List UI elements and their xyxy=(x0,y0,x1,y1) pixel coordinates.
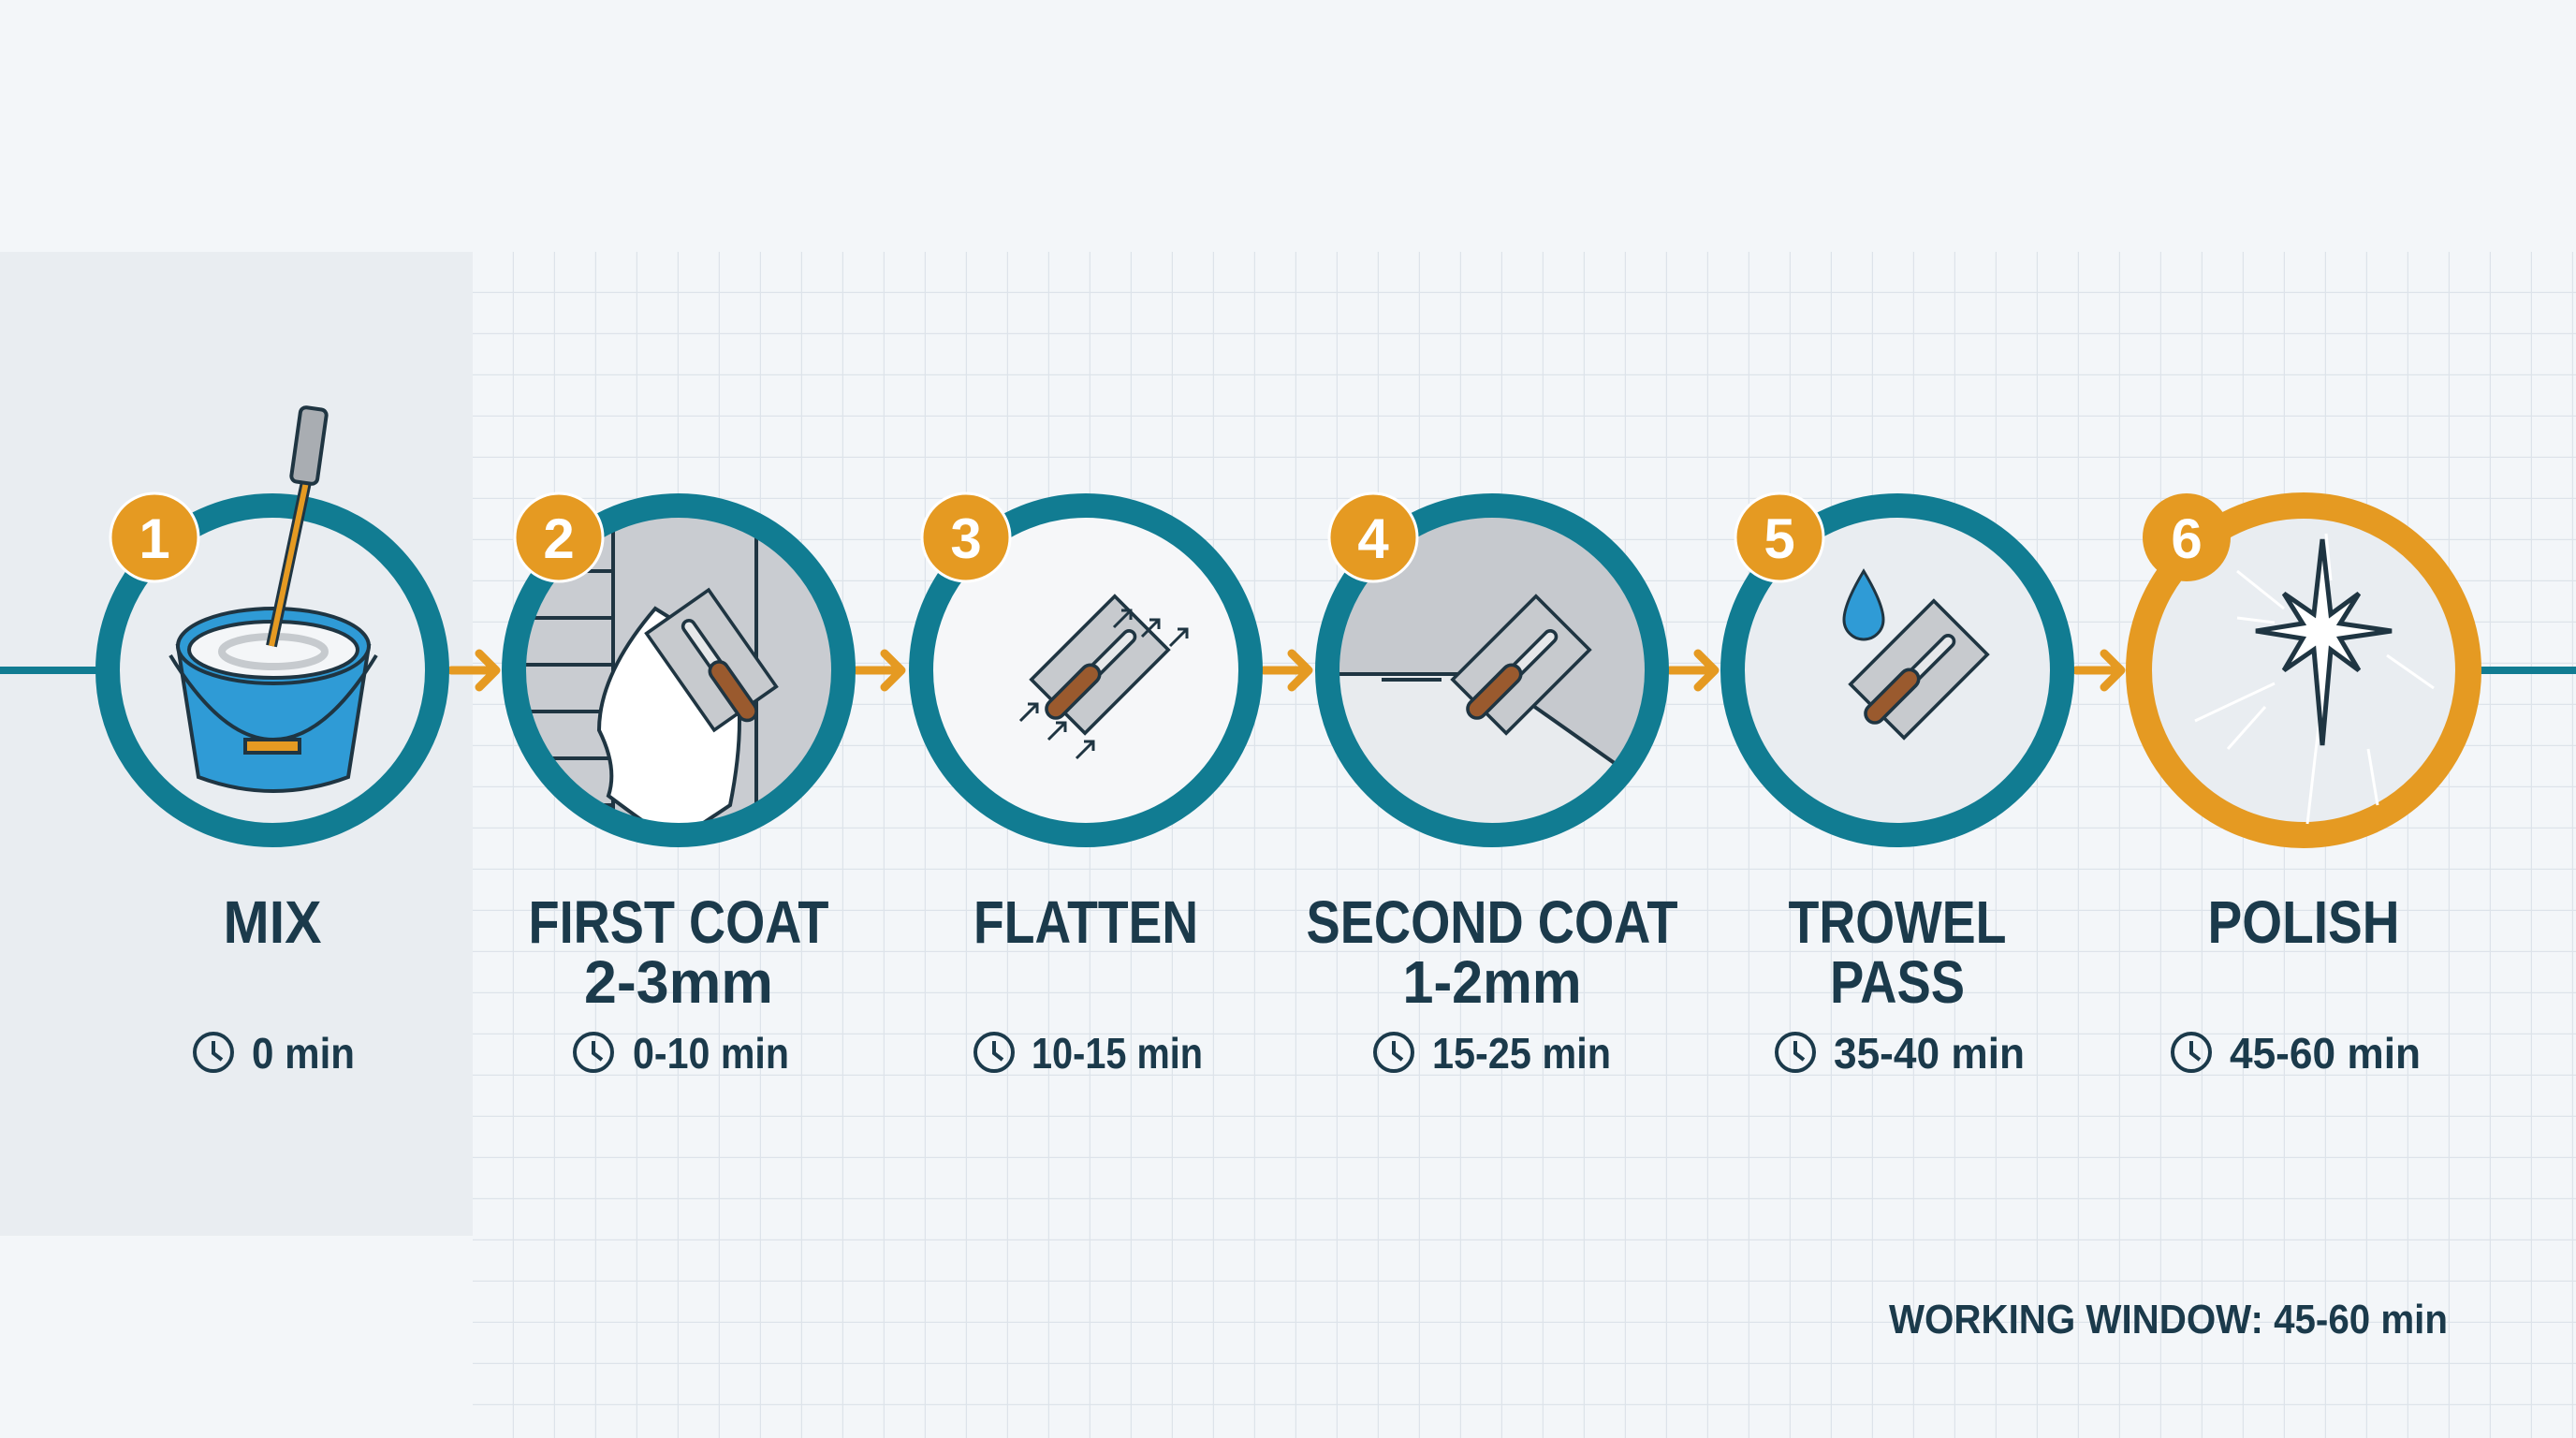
icon: sparkle xyxy=(2256,539,2392,745)
arrows xyxy=(451,653,2121,687)
badge 6: 6 xyxy=(2171,507,2203,570)
labels: POLISH xyxy=(2207,888,2400,956)
icon: water drop xyxy=(1844,571,1883,639)
step 4: second coat xyxy=(1327,493,1657,843)
labels: 1-2mm xyxy=(1402,948,1582,1016)
labels xyxy=(223,888,2400,1016)
badge 3: 3 xyxy=(950,507,982,570)
times: 35-40 min xyxy=(1834,1029,2025,1078)
step 2: first coat xyxy=(514,493,843,843)
labels: TROWEL xyxy=(1788,888,2007,956)
badge 2 xyxy=(515,493,603,581)
labels: FIRST COAT xyxy=(528,888,829,956)
step 6: polish xyxy=(2139,493,2468,835)
labels: SECOND COAT xyxy=(1307,888,1677,956)
badge 5 xyxy=(1735,493,1823,581)
labels: PASS xyxy=(1830,948,1965,1016)
timeline line right xyxy=(2471,667,2576,674)
step 1: mix xyxy=(108,406,437,835)
step 3: flatten xyxy=(921,493,1251,835)
panel: mix step background xyxy=(0,252,473,1236)
times: 15-25 min xyxy=(1432,1029,1611,1078)
badge 3 xyxy=(922,493,1010,581)
badge 1 xyxy=(110,493,198,581)
step 5: trowel pass xyxy=(1733,493,2062,835)
times: 0 min xyxy=(252,1029,355,1078)
icon: arrows xyxy=(1020,610,1187,758)
badge 2: 2 xyxy=(543,507,575,570)
labels: FLATTEN xyxy=(973,888,1198,956)
times: 10-15 min xyxy=(1032,1029,1203,1078)
times: 0-10 min xyxy=(633,1029,789,1078)
timeline line left xyxy=(0,667,103,674)
badge 4: 4 xyxy=(1357,507,1389,570)
times xyxy=(195,1029,2421,1078)
times: 45-60 min xyxy=(2230,1029,2421,1078)
icon: bucket xyxy=(170,406,376,791)
badge 6 xyxy=(2143,493,2231,581)
badge 4 xyxy=(1329,493,1417,581)
working window note: WORKING WINDOW: 45-60 min xyxy=(1889,1297,2448,1343)
badge 5: 5 xyxy=(1764,507,1795,570)
badge 1: 1 xyxy=(139,507,170,570)
labels: MIX xyxy=(223,888,322,956)
labels: 2-3mm xyxy=(584,948,773,1016)
